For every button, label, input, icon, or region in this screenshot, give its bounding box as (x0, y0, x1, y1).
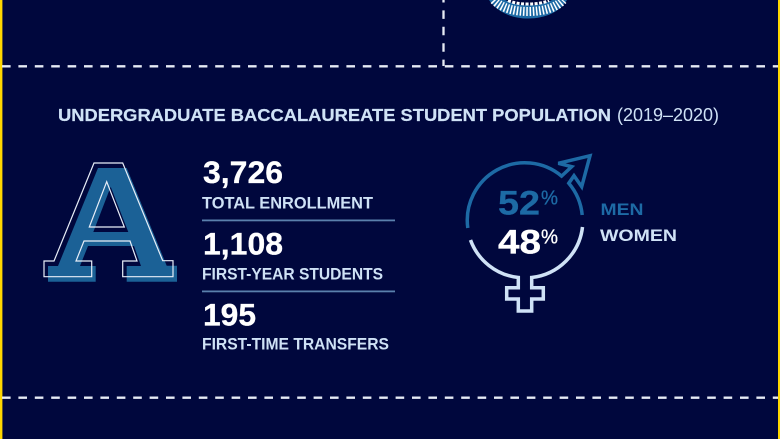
stat: total enrollment: 3,726 (203, 154, 283, 190)
stat: first-time transfers: 195 (203, 297, 256, 333)
icon: collegiate letter A (44, 163, 177, 282)
stat: total enrollment: TOTAL ENROLLMENT (202, 193, 374, 212)
heading: (2019–2020) (617, 105, 719, 125)
stat: first-time transfers: FIRST-TIME TRANSFERS (202, 334, 389, 353)
women percentage (498, 223, 558, 261)
men percentage: 52 (498, 184, 540, 222)
stat: total enrollment (202, 154, 374, 212)
stat: first-time transfers (202, 297, 389, 353)
icon: male symbol (467, 156, 590, 228)
legend: men: MEN (600, 200, 644, 219)
stats list (202, 154, 395, 353)
icon: female symbol (470, 227, 582, 311)
icon: coin (489, 0, 567, 18)
stat: first-year students (202, 225, 383, 283)
heading: UNDERGRADUATE BACCALAUREATE STUDENT POPULATION (58, 105, 611, 125)
women percentage: 48 (498, 223, 541, 261)
men percentage (498, 184, 558, 222)
stat: first-year students: 1,108 (203, 225, 283, 261)
women percentage: % (541, 226, 558, 248)
legend: women: WOMEN (600, 226, 677, 245)
men percentage: % (541, 187, 558, 209)
stat: first-year students: FIRST-YEAR STUDENTS (202, 264, 383, 283)
